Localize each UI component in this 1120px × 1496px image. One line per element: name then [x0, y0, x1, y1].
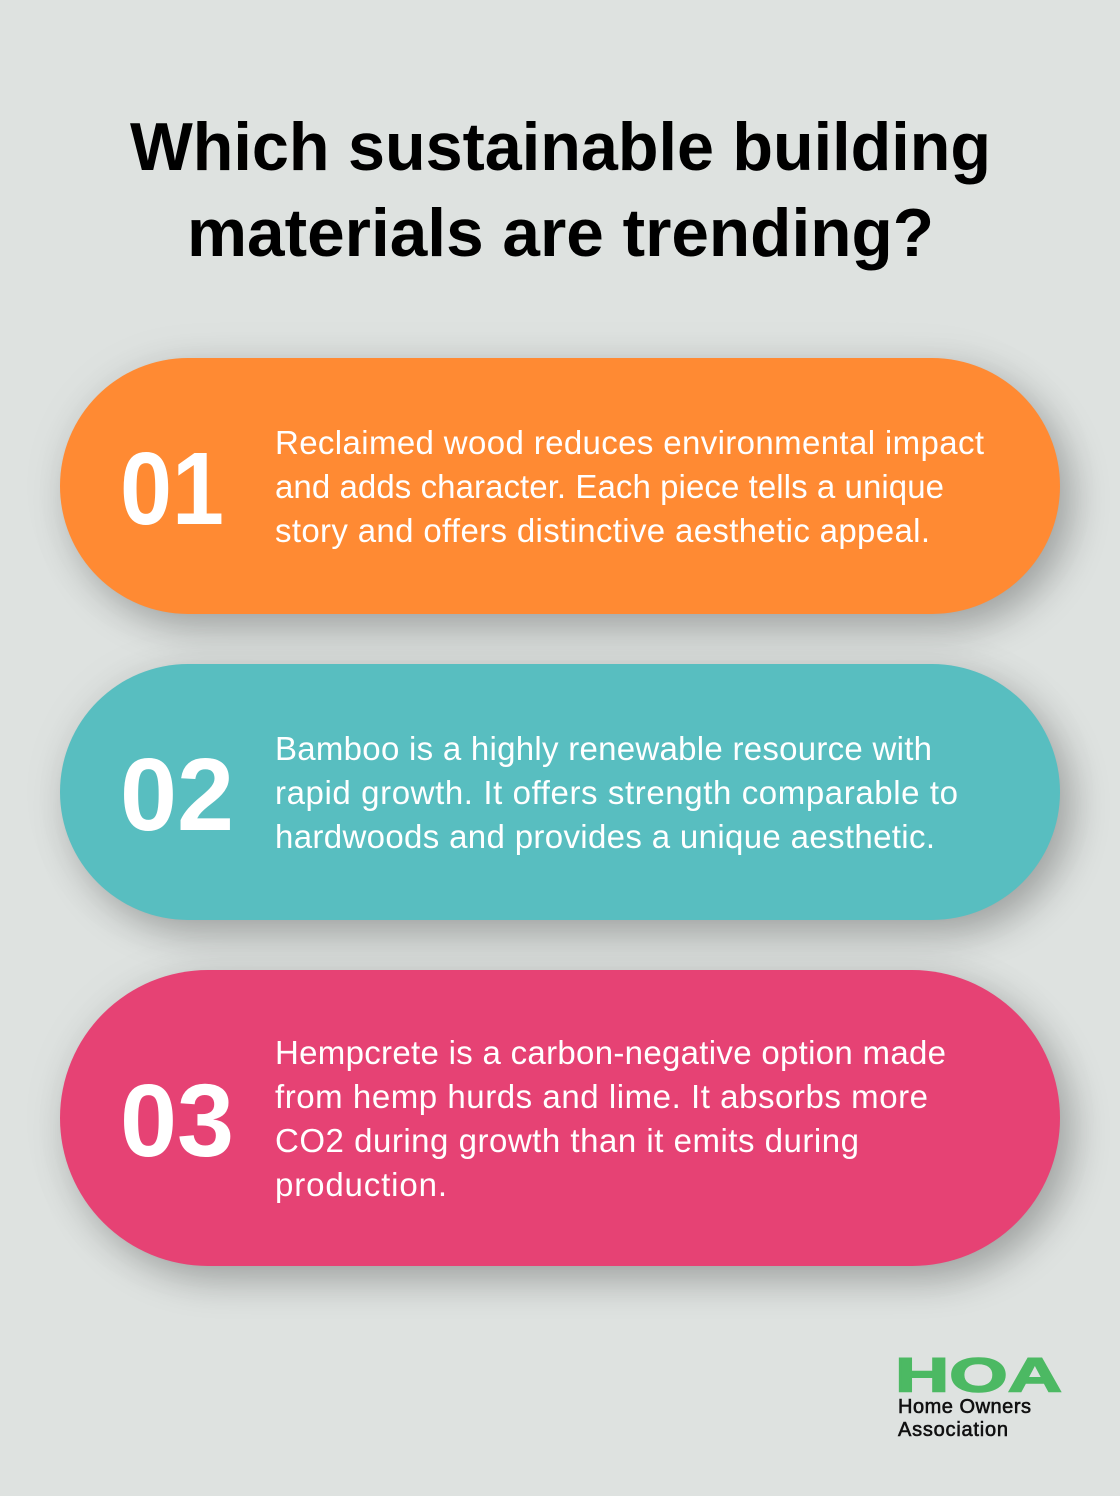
logo: HOA Home Owners Association: Home Owners	[898, 1396, 1031, 1418]
number 01: 01	[120, 431, 224, 546]
text block 02: hardwoods and provides a unique aesthetic.	[275, 818, 935, 855]
title: materials are trending?	[187, 195, 934, 271]
number 03: 03	[120, 1063, 234, 1178]
text block 03: Hempcrete is a carbon-negative option made	[275, 1034, 946, 1071]
text block 01	[275, 424, 984, 549]
title: Which sustainable building	[130, 109, 991, 185]
text block 02: Bamboo is a highly renewable resource with	[275, 730, 932, 767]
panel: card 01 background	[60, 358, 1060, 614]
card 02 content	[120, 730, 958, 855]
text block 03: production.	[275, 1166, 447, 1203]
card 01 content	[120, 424, 984, 549]
text block 03	[275, 1034, 946, 1203]
text block 03: from hemp hurds and lime. It absorbs more	[275, 1078, 928, 1115]
panel: card 03 background	[60, 970, 1060, 1266]
text block 03: CO2 during growth than it emits during	[275, 1122, 859, 1159]
logo: HOA Home Owners Association: Association	[898, 1419, 1008, 1441]
title	[130, 109, 991, 271]
text block 02	[275, 730, 958, 855]
number 02: 02	[120, 737, 234, 852]
logo: HOA Home Owners Association	[895, 1350, 1062, 1441]
card 03 content	[120, 1034, 946, 1203]
text block 02: rapid growth. It offers strength comparable to	[275, 774, 958, 811]
text block 01: story and offers distinctive aesthetic appeal.	[275, 512, 930, 549]
text block 01: Reclaimed wood reduces environmental impact	[275, 424, 984, 461]
panel: card 02 background	[60, 664, 1060, 920]
text block 01: and adds character. Each piece tells a unique	[275, 468, 944, 505]
logo: HOA Home Owners Association: HOA	[895, 1350, 1062, 1402]
